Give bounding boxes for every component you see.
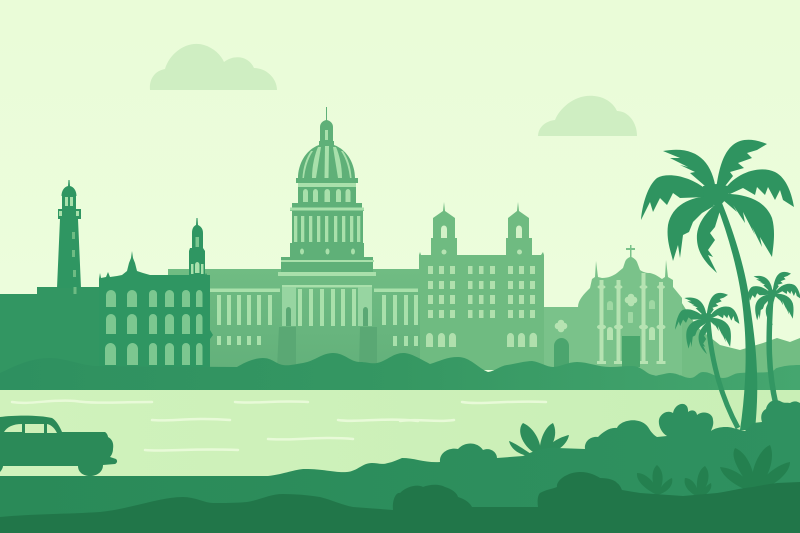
midground shore with bushes	[0, 400, 800, 533]
lighthouse	[57, 180, 81, 294]
left ground wall	[0, 287, 100, 380]
river water	[0, 390, 800, 480]
tree line along the shore	[0, 353, 800, 390]
cloud: left	[150, 44, 277, 90]
hotel building with two towers	[414, 202, 544, 370]
capitol wings	[168, 269, 420, 375]
dome ribs and windows	[210, 130, 418, 346]
fern on midground	[509, 423, 569, 456]
church building	[544, 245, 682, 375]
portico side panels	[282, 287, 372, 326]
water ripples	[12, 401, 546, 451]
cloud: right	[538, 96, 637, 136]
capitol building	[168, 107, 420, 375]
portico niches and steps	[277, 307, 377, 368]
palm tree: tall	[641, 140, 794, 430]
vintage car	[0, 416, 117, 476]
capitol dome and drum	[278, 107, 376, 276]
foreground ferns	[637, 445, 790, 497]
distant hills right	[680, 300, 800, 390]
palm tree: small left	[675, 293, 739, 428]
foreground ground with bushes	[0, 472, 800, 533]
palm tree: small right	[746, 272, 800, 405]
palace building with tower	[99, 218, 213, 378]
